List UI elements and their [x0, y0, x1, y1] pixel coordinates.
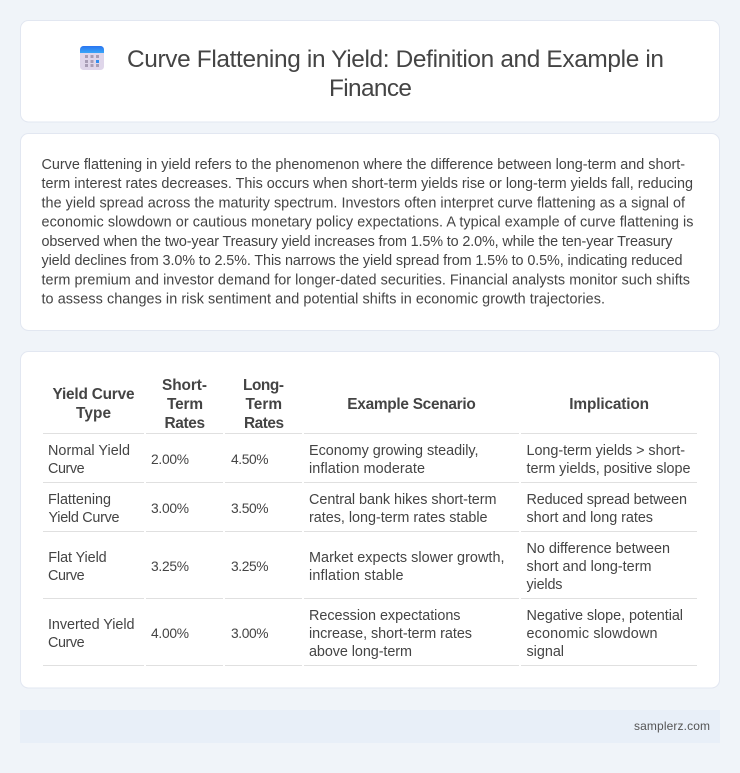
table row: inverted yield curve: 4.00%	[151, 626, 189, 641]
footer bar	[20, 710, 720, 743]
header: short-term rates: Term	[167, 396, 203, 413]
text block: definition paragraph: the yield spread across the maturity spectrum. Investors often interpret curve flattening as a signal of	[42, 196, 686, 212]
table row: normal yield curve: Long-term yields > short-	[526, 443, 685, 459]
table row: inverted yield curve: above long-term	[309, 644, 412, 660]
header: short-term rates: Rates	[164, 415, 205, 432]
text block: definition paragraph	[42, 157, 694, 308]
table row: flat yield curve: 3.25%	[231, 559, 268, 574]
text block: definition paragraph: term interest rates decreases. This occurs when short-term yields rise or long-term yields fall, reducing	[42, 176, 693, 192]
header: example scenario: Example Scenario	[347, 396, 476, 413]
text block: definition paragraph: to assess changes in risk sentiment and potential shifts in economic growth trajectories.	[42, 292, 605, 308]
table row: normal yield curve: 2.00%	[151, 452, 189, 467]
header: yield curve type: Type	[76, 405, 111, 422]
title: Finance	[329, 75, 412, 102]
table row: normal yield curve: Curve	[48, 461, 85, 477]
table row: flat yield curve: Curve	[48, 568, 85, 584]
table row: flattening yield curve: Central bank hikes short-term	[309, 492, 496, 508]
table row: flattening yield curve	[48, 492, 687, 526]
table row: flat yield curve: Market expects slower growth,	[309, 550, 504, 566]
table row: flattening yield curve: Yield Curve	[48, 510, 120, 526]
table row: flattening yield curve: 3.00%	[151, 501, 189, 516]
table header row	[52, 377, 649, 432]
header: long-term rates: Rates	[244, 415, 284, 432]
text block: definition paragraph: yield declines from 3.0% to 2.5%. This narrows the yield spread from 1.5% to 0.5%, indicating reduced	[42, 253, 682, 269]
table row: flat yield curve: 3.25%	[151, 559, 189, 574]
header: long-term rates: Long-	[243, 377, 284, 394]
table row: flat yield curve: No difference between	[526, 541, 670, 557]
table row: flattening yield curve: Flattening	[48, 492, 111, 508]
panel: yield curve table	[20, 352, 720, 688]
table row: normal yield curve: 4.50%	[231, 452, 268, 467]
table row: flattening yield curve: short and long rates	[526, 510, 653, 526]
table row: flattening yield curve: Reduced spread between	[526, 492, 687, 508]
table row: flat yield curve	[48, 541, 670, 593]
title: Curve Flattening in Yield: Definition and Example in	[127, 46, 664, 73]
icon: calendar	[80, 46, 104, 70]
header: yield curve type: Yield Curve	[52, 386, 135, 403]
header: implication: Implication	[569, 396, 649, 413]
table row: inverted yield curve: Inverted Yield	[48, 617, 134, 633]
header: short-term rates	[162, 377, 207, 432]
footer source text: samplerz.com	[634, 719, 710, 733]
text block: definition paragraph: observed when the two-year Treasury yield increases from 1.5% to 2.0%, while the ten-year Treasury	[42, 234, 673, 250]
table row: inverted yield curve: Recession expectations	[309, 608, 460, 624]
title	[127, 46, 664, 102]
panel: title card	[20, 20, 720, 122]
table row: inverted yield curve: increase, short-term rates	[309, 626, 472, 642]
text block: definition paragraph: term premium and investor demand for longer-dated securities. Financial analysts monitor such shifts	[42, 272, 690, 288]
table row: inverted yield curve	[48, 608, 683, 660]
table row: inverted yield curve: Curve	[48, 635, 85, 651]
table row: inverted yield curve: 3.00%	[231, 626, 268, 641]
table row: flattening yield curve: rates, long-term rates stable	[309, 510, 488, 526]
panel: description	[20, 134, 720, 330]
header: long-term rates	[243, 377, 284, 432]
text block: definition paragraph: economic slowdown or cautious monetary policy expectations. A typical example of curve flattening is	[42, 214, 694, 230]
table row: flat yield curve: yields	[526, 577, 562, 593]
table row: flat yield curve: short and long-term	[526, 559, 652, 575]
table row: inverted yield curve: economic slowdown	[526, 626, 658, 642]
table row: normal yield curve: inflation moderate	[309, 461, 425, 477]
table row: normal yield curve: Normal Yield	[48, 443, 130, 459]
table row: inverted yield curve: signal	[526, 644, 564, 660]
table row: normal yield curve: term yields, positive slope	[526, 461, 690, 477]
text block: definition paragraph: Curve flattening in yield refers to the phenomenon where the difference between long-term and short-	[42, 157, 685, 173]
header: short-term rates: Short-	[162, 377, 207, 394]
header: long-term rates: Term	[246, 396, 282, 413]
table row: flat yield curve: Flat Yield	[48, 550, 107, 566]
table row: normal yield curve: Economy growing steadily,	[309, 443, 478, 459]
table row: flattening yield curve: 3.50%	[231, 501, 268, 516]
header: yield curve type	[52, 386, 135, 422]
table row: normal yield curve	[48, 443, 690, 477]
table row: flat yield curve: inflation stable	[309, 568, 404, 584]
table row: inverted yield curve: Negative slope, potential	[526, 608, 683, 624]
